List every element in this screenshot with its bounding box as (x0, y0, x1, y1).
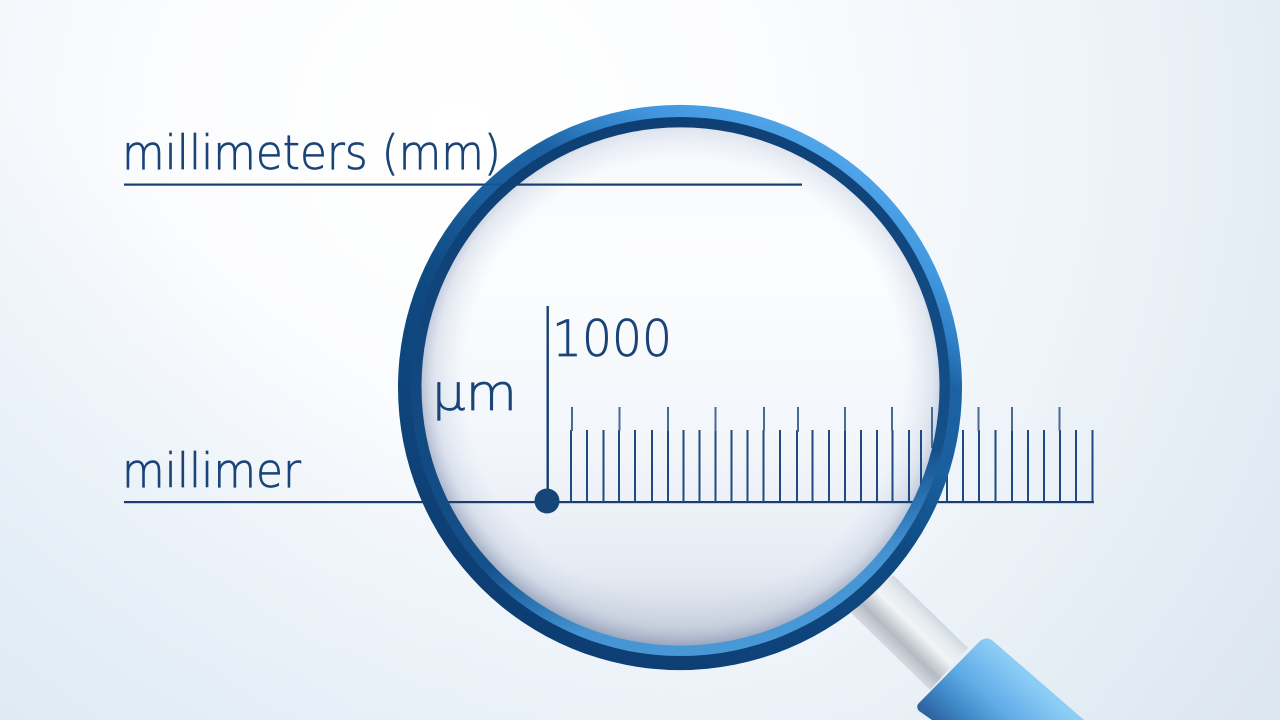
lens edge shading (418, 124, 942, 648)
metal shaft (851, 575, 968, 690)
ruler baseline (124, 501, 1094, 503)
magnifier handle (851, 575, 1084, 720)
line seen through ring (484, 184, 518, 186)
lens fill (418, 124, 942, 648)
ruler ticks (571, 430, 1092, 502)
blue grip (917, 638, 1084, 720)
ruler tall ticks (572, 407, 1060, 448)
magnifier lens glass (418, 124, 942, 648)
label: micrometer unit: µm (432, 364, 517, 422)
label: millimeters (mm): millimeters (mm) (122, 126, 501, 181)
vertical axis (546, 306, 549, 502)
magnifier ring (398, 105, 962, 670)
label: 1000: 1000 (552, 310, 672, 368)
inner rim (411, 117, 950, 656)
micrometer ruler (124, 306, 1094, 514)
label: millimer: millimer (122, 444, 302, 499)
ruler origin dot (534, 488, 560, 514)
top measuring line (124, 184, 802, 186)
outer rim (398, 105, 962, 670)
